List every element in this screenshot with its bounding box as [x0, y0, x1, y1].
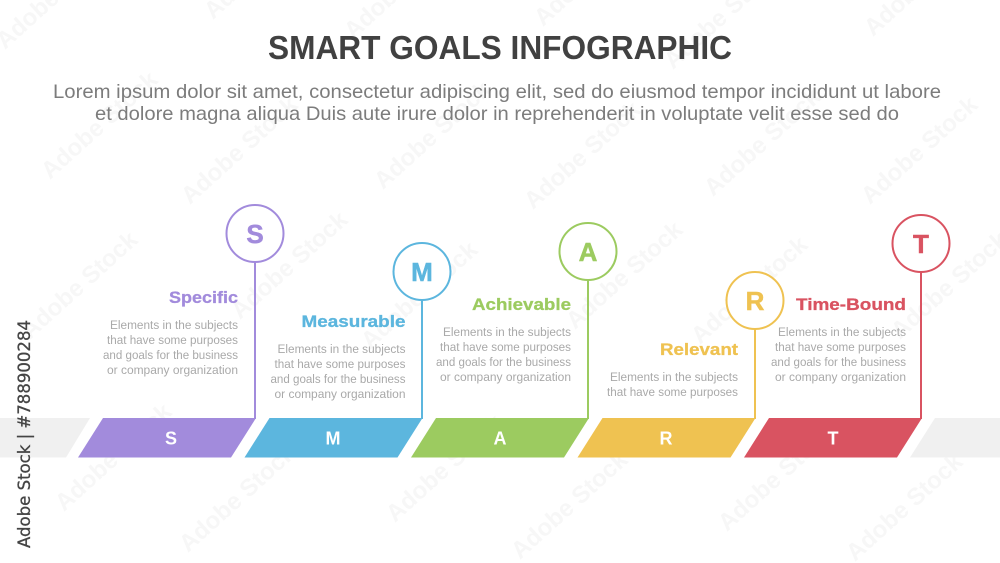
text: Adobe Stock	[36, 66, 164, 184]
column: Relevant: Elements in the subjects	[610, 370, 738, 384]
grey band right end	[910, 418, 1000, 458]
text: Adobe Stock	[369, 76, 497, 194]
column: Measurable	[244, 243, 450, 458]
text: Adobe Stock	[506, 446, 634, 563]
column: Relevant: R	[660, 428, 672, 448]
text: Adobe Stock	[686, 231, 814, 349]
column: Measurable: M	[326, 428, 340, 448]
grey band left end	[0, 418, 90, 458]
column: Time-Bound	[744, 215, 950, 458]
text: Adobe Stock	[16, 226, 144, 344]
column: Specific: Elements in the subjects	[110, 318, 238, 332]
text: Adobe Stock	[561, 216, 689, 334]
text: Adobe Stock	[699, 83, 827, 201]
text: Adobe Stock	[50, 398, 178, 516]
column: Specific: S	[246, 219, 264, 249]
column: Achievable: that have some purposes	[440, 340, 571, 354]
text: Adobe Stock	[174, 439, 302, 557]
column: Measurable: Elements in the subjects	[278, 342, 406, 356]
column: Achievable: Elements in the subjects	[443, 325, 571, 339]
column: Measurable: Measurable	[302, 312, 406, 331]
text: Adobe Stock	[519, 96, 647, 214]
column: Measurable: that have some purposes	[274, 357, 406, 371]
subtitle text: et dolore magna aliqua Duis aute irure dolor in reprehenderit in voluptate velit esse sed do	[95, 103, 899, 125]
column: Relevant: that have some purposes	[607, 385, 738, 399]
column: Time-Bound: that have some purposes	[775, 340, 906, 354]
column: Achievable: or company organization	[440, 370, 571, 384]
column: Specific: S	[165, 428, 177, 448]
column: Specific: or company organization	[107, 363, 238, 377]
text: Adobe Stock	[841, 448, 969, 563]
column: Specific: and goals for the business	[103, 348, 238, 362]
column: Measurable: and goals for the business	[270, 372, 406, 386]
column: Time-Bound: Elements in the subjects	[778, 325, 906, 339]
subtitle text	[53, 81, 941, 125]
column: Achievable: A	[579, 237, 598, 267]
subtitle text: Lorem ipsum dolor sit amet, consectetur adipiscing elit, sed do eiusmod tempor incididunt ut labore	[53, 81, 941, 103]
column: Specific	[78, 205, 284, 458]
text: Adobe Stock	[176, 91, 304, 209]
column: Time-Bound: T	[828, 428, 838, 448]
text: Adobe Stock	[856, 91, 984, 209]
text: Adobe Stock	[356, 236, 484, 354]
side credit: Adobe Stock number: Adobe Stock | #788900284	[15, 320, 35, 548]
column: Achievable: and goals for the business	[436, 355, 571, 369]
column: Specific: Specific	[169, 288, 238, 307]
column: Achievable: Achievable	[472, 295, 571, 314]
column: Time-Bound: T	[913, 229, 929, 259]
column: Time-Bound: Time-Bound	[796, 295, 906, 314]
column: Time-Bound: or company organization	[775, 370, 906, 384]
title: SMART GOALS INFOGRAPHIC	[268, 30, 732, 67]
text: Adobe Stock	[226, 206, 354, 324]
column: Achievable	[411, 223, 616, 458]
text: Adobe Stock	[381, 409, 509, 527]
column: Measurable: or company organization	[274, 387, 406, 401]
column: Time-Bound: and goals for the business	[771, 355, 906, 369]
column: Relevant: R	[746, 286, 765, 316]
column: Achievable: A	[494, 428, 506, 448]
column: Measurable: M	[411, 257, 433, 287]
column: Specific: that have some purposes	[107, 333, 238, 347]
text: Adobe Stock	[713, 418, 841, 536]
column: Relevant: Relevant	[660, 340, 738, 359]
column: Relevant	[578, 272, 784, 458]
